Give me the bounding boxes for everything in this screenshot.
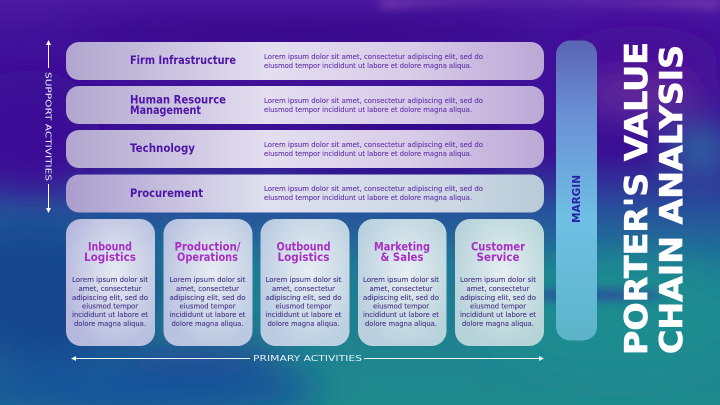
label: margin: MARGIN (571, 175, 583, 223)
text: marketing description: Lorem ipsum dolor sit (363, 275, 439, 284)
text: procurement description (264, 184, 483, 202)
label: support activities: SUPPORT ACTIVITIES (44, 72, 52, 181)
title (619, 42, 690, 355)
heading: human resource management: Human Resource (130, 92, 226, 106)
heading: inbound logistics: Logistics (84, 250, 136, 264)
text: customer service description: dolore magna aliqua. (462, 319, 534, 328)
text: production description: eiusmod tempor (180, 302, 236, 310)
panel: procurement (66, 174, 544, 212)
text: outbound description (266, 275, 342, 328)
heading: inbound logistics: Inbound (88, 240, 132, 254)
panel: margin (556, 40, 597, 340)
heading: production / operations: Production/ (174, 240, 241, 254)
text: customer service description: adipiscing elit, sed do (460, 293, 536, 302)
heading: procurement: Procurement (130, 186, 203, 200)
text: firm infrastructure description: eiusmod tempor incididunt ut labore et dolore magna aliqua. (264, 61, 472, 70)
text: technology description (264, 140, 483, 158)
text: inbound description: Lorem ipsum dolor sit (72, 275, 148, 284)
text: customer service description: amet, consectetur (466, 284, 530, 293)
text: firm infrastructure description: Lorem ipsum dolor sit amet, consectetur adipiscing elit, sed do (264, 52, 483, 61)
text: marketing description (363, 275, 439, 328)
text: customer service description (460, 275, 536, 328)
title: PORTER'S VALUE (619, 42, 655, 355)
text: technology description: Lorem ipsum dolor sit amet, consectetur adipiscing elit, sed do (264, 140, 483, 149)
arrow: primary activities (71, 356, 544, 361)
panel: outbound logistics (260, 219, 350, 346)
panel: customer service (455, 219, 544, 346)
text: customer service description: incididunt ut labore et (460, 310, 536, 319)
panel: production / operations (164, 219, 252, 346)
text: procurement description: eiusmod tempor incididunt ut labore et dolore magna aliqua. (264, 193, 472, 202)
text: technology description: eiusmod tempor incididunt ut labore et dolore magna aliqua. (264, 149, 472, 158)
text: outbound description: adipiscing elit, sed do (266, 293, 342, 302)
text: production description: Lorem ipsum dolor sit (170, 275, 246, 284)
text: production description: incididunt ut labore et (170, 310, 246, 319)
heading: marketing and sales (374, 240, 430, 264)
heading: outbound logistics (276, 240, 330, 264)
text: outbound description: incididunt ut labore et (266, 310, 342, 319)
text: firm infrastructure description (264, 52, 483, 70)
panel: human resource management (66, 86, 544, 124)
heading: customer service (471, 240, 525, 264)
arrow: support activities (46, 40, 51, 213)
text: inbound description: dolore magna aliqua. (74, 319, 146, 328)
label: primary activities: PRIMARY ACTIVITIES (253, 354, 362, 363)
heading: marketing and sales: Marketing (374, 240, 430, 254)
heading: production / operations: Operations (177, 250, 238, 264)
text: customer service description: eiusmod tempor (470, 302, 526, 310)
heading: production / operations (174, 240, 241, 264)
heading: technology: Technology (130, 141, 195, 155)
heading: inbound logistics (84, 240, 136, 264)
text: outbound description: dolore magna aliqua. (268, 319, 340, 328)
text: marketing description: adipiscing elit, sed do (363, 293, 439, 302)
text: production description: dolore magna aliqua. (172, 319, 244, 328)
text: inbound description: amet, consectetur (78, 284, 142, 293)
text: inbound description: eiusmod tempor (82, 302, 138, 310)
text: outbound description: Lorem ipsum dolor sit (266, 275, 342, 284)
text: inbound description: incididunt ut labore et (72, 310, 148, 319)
heading: human resource management (130, 92, 226, 117)
heading: firm infrastructure: Firm Infrastructure (130, 53, 236, 67)
text: inbound description: adipiscing elit, sed do (72, 293, 148, 302)
text: production description: amet, consectetur (176, 284, 239, 293)
panel: marketing and sales (358, 219, 446, 346)
text: inbound description (72, 275, 148, 328)
panel: firm infrastructure (66, 42, 544, 80)
title: CHAIN ANALYSIS (654, 45, 690, 354)
text: marketing description: amet, consectetur (370, 284, 433, 293)
text: production description (170, 275, 246, 328)
text: outbound description: eiusmod tempor (276, 302, 332, 310)
text: outbound description: amet, consectetur (272, 284, 335, 293)
text: marketing description: eiusmod tempor (373, 302, 429, 310)
panel: technology (66, 130, 544, 168)
text: procurement description: Lorem ipsum dolor sit amet, consectetur adipiscing elit, sed do (264, 184, 483, 193)
heading: outbound logistics: Outbound (276, 240, 330, 254)
text: production description: adipiscing elit, sed do (170, 293, 246, 302)
text: marketing description: incididunt ut labore et (363, 310, 439, 319)
heading: customer service: Customer (471, 240, 525, 254)
text: human resource description: eiusmod tempor incididunt ut labore et dolore magna aliqua. (264, 105, 472, 114)
heading: outbound logistics: Logistics (278, 250, 330, 264)
text: human resource description (264, 96, 483, 114)
heading: marketing and sales: & Sales (380, 250, 424, 264)
text: marketing description: dolore magna aliqua. (365, 319, 437, 328)
heading: customer service: Service (476, 250, 520, 264)
text: customer service description: Lorem ipsum dolor sit (460, 275, 536, 284)
heading: human resource management: Management (130, 103, 201, 117)
text: human resource description: Lorem ipsum dolor sit amet, consectetur adipiscing elit, sed do (264, 96, 483, 105)
panel: inbound logistics (66, 219, 155, 346)
